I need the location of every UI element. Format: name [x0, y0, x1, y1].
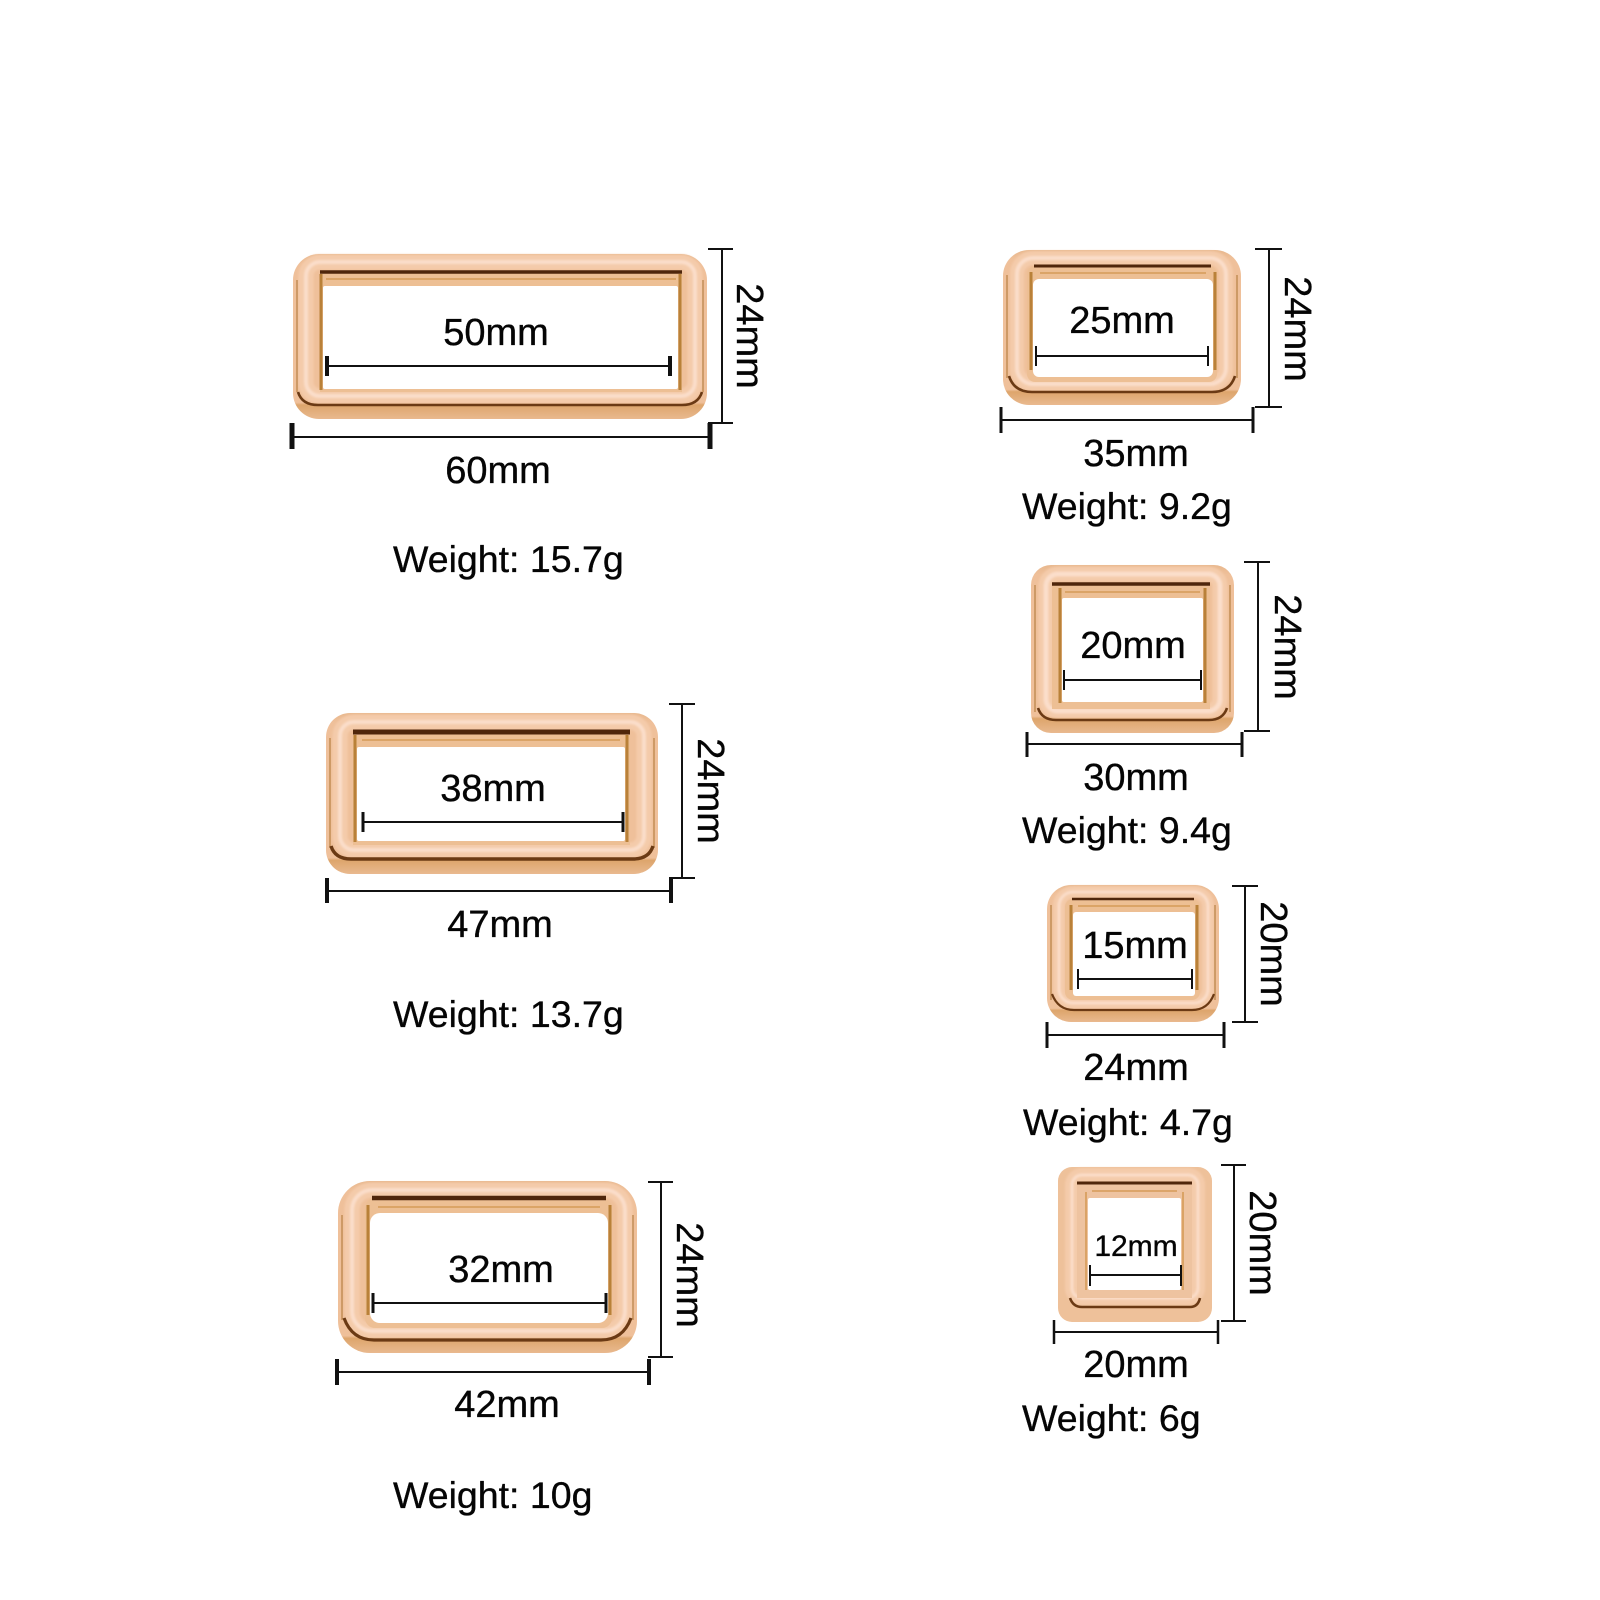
icon: 30mm gold ring [1031, 565, 1234, 733]
item: 35mm ring [1001, 249, 1318, 527]
height: 24mm: 24mm [668, 1222, 710, 1328]
weight: Weight: 10g [393, 1474, 592, 1516]
outer width: 20mm: 20mm [1083, 1344, 1189, 1386]
height: 24mm: 24mm [1276, 276, 1318, 382]
weight: Weight: 9.2g [1022, 485, 1232, 527]
outer width: 47mm: 47mm [447, 904, 553, 946]
weight: Weight: 4.7g [1023, 1101, 1233, 1143]
outer width: 35mm: 35mm [1083, 433, 1189, 475]
item: 60mm ring [292, 249, 770, 580]
inner width: 12mm: 12mm [1094, 1230, 1178, 1263]
outer width: 42mm: 42mm [454, 1384, 560, 1426]
inner width: 15mm [1078, 925, 1192, 989]
inner width: 15mm: 15mm [1082, 925, 1188, 967]
icon: 24mm gold ring [1047, 885, 1219, 1022]
item: 47mm ring [326, 704, 731, 1035]
inner width: 20mm [1064, 625, 1201, 690]
height: 24mm: 24mm [728, 283, 770, 389]
weight: Weight: 9.4g [1022, 809, 1232, 851]
height: 24mm: 24mm [1266, 594, 1308, 700]
height: 20mm: 20mm [1241, 1190, 1283, 1296]
icon: 60mm gold ring [293, 254, 707, 419]
item: 42mm ring [337, 1181, 710, 1516]
weight: Weight: 13.7g [393, 993, 624, 1035]
outer width: 24mm: 24mm [1083, 1047, 1189, 1089]
item: 30mm ring [1022, 562, 1308, 851]
icon: 20mm gold ring [1058, 1167, 1212, 1322]
icon: 42mm gold ring [338, 1181, 637, 1353]
height: 24mm: 24mm [689, 738, 731, 844]
inner width: 20mm: 20mm [1080, 625, 1186, 667]
item: 20mm ring [1022, 1165, 1283, 1439]
outer width: 30mm: 30mm [1083, 757, 1189, 799]
icon: 47mm gold ring [326, 713, 658, 874]
inner width: 25mm: 25mm [1069, 300, 1175, 342]
item: 24mm ring [1023, 885, 1294, 1143]
outer width: 60mm: 60mm [445, 450, 551, 492]
weight: Weight: 15.7g [393, 538, 624, 580]
weight: Weight: 6g [1022, 1397, 1201, 1439]
height: 20mm: 20mm [1252, 901, 1294, 1007]
inner width: 32mm: 32mm [448, 1249, 554, 1291]
inner width: 50mm: 50mm [443, 312, 549, 354]
height: 20mm [1232, 886, 1294, 1022]
icon: 35mm gold ring [1003, 250, 1241, 405]
inner width: 38mm: 38mm [440, 768, 546, 810]
inner width: 12mm [1090, 1230, 1181, 1286]
